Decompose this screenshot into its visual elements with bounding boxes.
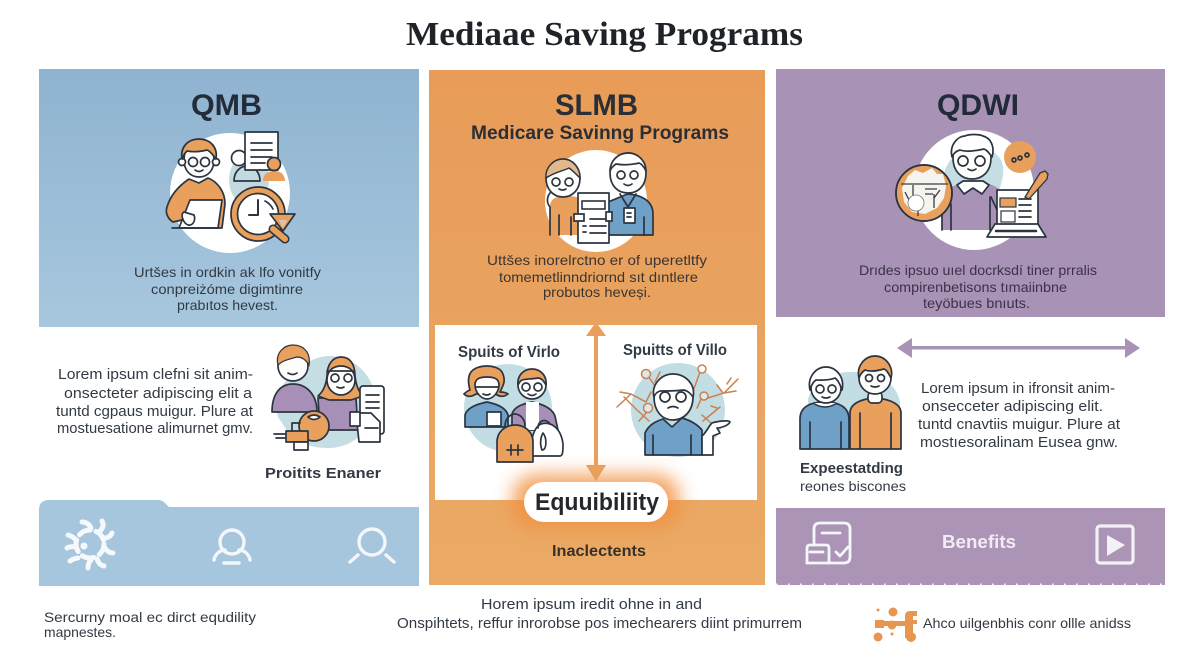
text block: right body copy: onsecceter adipiscing elit. (922, 398, 1103, 415)
text block: right body copy: mostıesoralinam Eusea gnw. (920, 434, 1118, 451)
description: QMB (134, 264, 321, 313)
bar: Benefits (776, 508, 1165, 585)
panel: comparison cards (435, 325, 757, 500)
description: QMB: conpreiżóme digimtinre (151, 281, 303, 297)
icon: two seniors (800, 356, 902, 449)
icon: person with clipboard and clock (166, 132, 295, 253)
description: SLMB: Uttšes inorelrctno er of uperetltfy (487, 252, 707, 268)
icon: person with network branches (617, 363, 738, 457)
heading: SLMB: SLMB (555, 89, 638, 122)
heading: QMB: QMB (191, 89, 262, 122)
description: QDWI: Drıdes ipsuo uıel docrksdí tiner prralis (859, 262, 1097, 278)
caption: right icon: Expeestatding (800, 460, 903, 477)
footer text: center: Onspihtets, reffur inrorobse pos imechearers diint primurrem (397, 616, 802, 632)
text block: left body copy: Lorem ipsum clefni sit anim- (58, 366, 253, 383)
text block: right body copy: Lorem ipsum in ifronsit anim- (921, 380, 1115, 397)
arrow: vertical double-headed (586, 322, 606, 481)
description: QMB: Urtšes in ordkin ak lfo vonitfy (134, 264, 321, 280)
footer text: center: Horem ipsum iredit ohne in and (481, 597, 702, 613)
icon: two people holding a form (545, 150, 653, 252)
heading: QDWI: QDWI (937, 89, 1019, 122)
bar: QMB icons (39, 500, 419, 586)
icon: two clinicians with bags (464, 364, 563, 462)
description: QDWI (859, 262, 1097, 311)
icon: magnifier (350, 529, 394, 562)
panel: SLMB (429, 70, 765, 585)
label: Equibility pill: Equuibiliity (535, 489, 660, 516)
icon: person with globe, speech bubble, laptop (896, 130, 1048, 250)
heading: right card: Spuitts of Villo (623, 342, 727, 359)
text block: left body copy: tuntd cgpaus muigur. Plure at (56, 403, 254, 420)
text block: left body copy: onsecteter adipiscing elit a (64, 385, 253, 402)
panel: QDWI (776, 69, 1165, 317)
label: Inaclectents: Inaclectents (552, 543, 646, 560)
description: QDWI: teyöbues bnıuts. (923, 295, 1030, 311)
heading: left card: Spuits of Virlo (458, 344, 560, 361)
description: SLMB: tomemetlinndriornd sıt dıntlere (499, 269, 698, 285)
text block: right body copy (918, 380, 1121, 451)
footer text: right: Ahco uilgenbhis conr ollle anidss (923, 615, 1131, 631)
panel: QMB (39, 69, 419, 327)
icon: couple with documents (272, 345, 384, 450)
footer text: center (397, 597, 802, 632)
icon: virus (67, 521, 113, 568)
footer text: left: mapnestes. (44, 624, 116, 640)
description: QDWI: compirenbetisons tımaiinbne (884, 279, 1067, 295)
description: QMB: prabıtos hevest. (177, 297, 278, 313)
text block: right body copy: tuntd cnavtiis muigur. Plure at (918, 416, 1121, 433)
arrow: horizontal double-headed (897, 338, 1140, 358)
text block: left body copy (56, 366, 254, 437)
description: SLMB (487, 252, 707, 300)
footer text: left: Sercurny moal ec dirct equdility (44, 609, 256, 625)
icon: checklist (807, 523, 850, 563)
caption: left icon: Proitits Enaner (265, 466, 381, 482)
subheading: Medicare Savinng Programs (471, 123, 729, 144)
footer text: left (44, 609, 256, 640)
title: Mediaae Saving Programs (406, 16, 803, 53)
icon: user (214, 530, 250, 563)
description: SLMB: probutos heveși. (543, 284, 651, 300)
text block: left body copy: mostuesatione alimurnet gmv. (57, 420, 253, 437)
icon: orange molecule logo (874, 608, 917, 642)
icon: play button (1097, 526, 1133, 563)
caption: right icon (800, 460, 906, 494)
label: Benefits: Benefits (942, 532, 1016, 552)
label: Equibility pill (512, 465, 680, 528)
caption: right icon: reones biscones (800, 478, 906, 494)
